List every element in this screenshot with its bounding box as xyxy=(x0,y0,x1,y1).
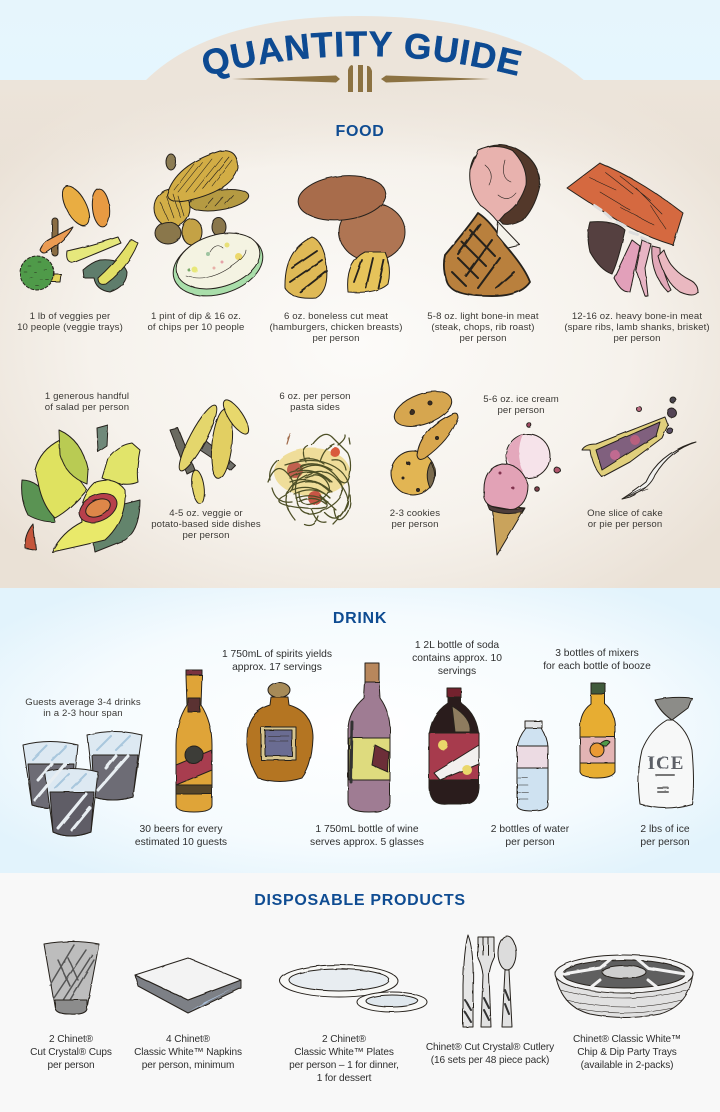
products background xyxy=(0,873,720,1112)
heading: drink: DRINK xyxy=(333,610,387,627)
caption: side dishes: potato-based side dishes xyxy=(151,519,261,530)
caption: ice cream: per person xyxy=(497,405,545,416)
icon: beer bottle xyxy=(176,670,212,812)
caption: soda: 1 2L bottle of soda xyxy=(415,640,499,651)
caption: ice: per person xyxy=(640,837,690,848)
caption: beer: 30 beers for every xyxy=(140,824,223,835)
caption: napkins: 4 Chinet® xyxy=(166,1034,211,1045)
item: beer xyxy=(135,670,227,848)
top fade xyxy=(0,80,720,170)
icon: pie slice and fork xyxy=(582,397,696,499)
item: mixers xyxy=(543,648,651,778)
panel: food xyxy=(0,16,720,588)
caption: trays: Chinet® Classic White™ xyxy=(573,1034,681,1045)
item: spirits xyxy=(222,649,332,782)
item: chips and dip xyxy=(147,151,270,333)
caption: side dishes: 4-5 oz. veggie or xyxy=(169,508,243,519)
item: glasses xyxy=(23,697,142,836)
caption: cups: Cut Crystal® Cups xyxy=(30,1047,112,1058)
caption: ice: 2 lbs of ice xyxy=(640,824,690,835)
caption: plates: Classic White™ Plates xyxy=(294,1047,394,1058)
item: ice cream xyxy=(483,394,560,555)
caption: trays: Chip & Dip Party Trays xyxy=(577,1047,677,1058)
icon: wine bottle xyxy=(348,663,390,812)
caption: soda: servings xyxy=(438,666,476,677)
item: boneless meat xyxy=(269,172,405,344)
icon: knife, fork, spoon xyxy=(463,935,516,1027)
caption: cutlery: Chinet® Cut Crystal® Cutlery xyxy=(426,1042,555,1053)
item: cake or pie xyxy=(582,397,696,530)
item: water xyxy=(491,721,570,848)
caption: cookies: per person xyxy=(391,519,439,530)
item: plates xyxy=(280,965,427,1084)
item: cups xyxy=(30,942,112,1071)
header arch xyxy=(145,16,585,81)
caption: plates: per person – 1 for dinner, xyxy=(289,1060,399,1071)
title: QUANTITY GUIDE xyxy=(203,31,522,79)
caption: boneless meat: per person xyxy=(312,333,360,344)
icon: plates xyxy=(280,965,427,1012)
caption: trays: (available in 2-packs) xyxy=(581,1060,673,1071)
caption: heavy ribs: (spare ribs, lamb shanks, brisket) xyxy=(564,322,710,333)
caption: wine: serves approx. 5 glasses xyxy=(310,837,424,848)
item: salad xyxy=(22,391,140,552)
icon: mixer bottle xyxy=(580,683,615,778)
caption: ice cream: 5-6 oz. ice cream xyxy=(483,394,559,405)
caption: bone-in meat: 5-8 oz. light bone-in meat xyxy=(427,311,539,322)
panel: disposable products xyxy=(0,873,720,1112)
caption: chips and dip: 1 pint of dip & 16 oz. xyxy=(151,311,241,322)
item: bone-in meat xyxy=(427,144,540,344)
caption: boneless meat: (hamburgers, chicken breasts) xyxy=(269,322,403,333)
caption: cups: per person xyxy=(47,1060,95,1071)
icon: napkins xyxy=(135,958,241,1013)
caption: plates: 1 for dessert xyxy=(317,1073,372,1084)
drink background xyxy=(0,588,720,873)
caption: chips and dip: of chips per 10 people xyxy=(147,322,245,333)
caption: cake or pie: or pie per person xyxy=(588,519,662,530)
caption: cookies: 2-3 cookies xyxy=(390,508,440,519)
item: veggies xyxy=(17,182,138,333)
caption: spirits: 1 750mL of spirits yields xyxy=(222,649,332,660)
icon: water bottle xyxy=(517,721,548,811)
caption: glasses: in a 2-3 hour span xyxy=(43,708,123,719)
icon: boneless meat xyxy=(285,172,405,298)
caption: bone-in meat: per person xyxy=(459,333,507,344)
caption: pasta: pasta sides xyxy=(290,402,340,413)
caption: veggies: 1 lb of veggies per xyxy=(30,311,111,322)
icon: chip and dip tray xyxy=(555,955,693,1018)
caption: veggies: 10 people (veggie trays) xyxy=(17,322,123,333)
caption: pasta: 6 oz. per person xyxy=(279,391,351,402)
icon: chips and dip xyxy=(154,151,270,306)
caption: napkins: Classic White™ Napkins xyxy=(134,1047,242,1058)
caption: soda: contains approx. 10 xyxy=(412,653,502,664)
food background xyxy=(0,80,720,588)
caption: cups: 2 Chinet® xyxy=(49,1034,94,1045)
item: cutlery xyxy=(426,935,555,1066)
caption: wine: 1 750mL bottle of wine xyxy=(315,824,419,835)
caption: beer: estimated 10 guests xyxy=(135,837,227,848)
item: cookies xyxy=(390,385,458,530)
icon: potato wedges xyxy=(170,397,253,505)
caption: salad: 1 generous handful xyxy=(45,391,129,402)
item: napkins xyxy=(134,958,242,1071)
icon: soda bottle xyxy=(429,688,479,804)
caption: boneless meat: 6 oz. boneless cut meat xyxy=(284,311,388,322)
caption: cutlery: (16 sets per 48 piece pack) xyxy=(431,1055,549,1066)
panel: drink xyxy=(0,588,720,873)
icon: spaghetti xyxy=(268,434,350,525)
icon: salad xyxy=(22,425,140,552)
panel: header background xyxy=(0,0,720,81)
caption: heavy ribs: per person xyxy=(613,333,661,344)
icon: veggie tray xyxy=(20,182,138,292)
item: soda xyxy=(412,640,502,804)
caption: napkins: per person, minimum xyxy=(142,1060,234,1071)
icon: ham and steak xyxy=(444,144,540,296)
caption: mixers: for each bottle of booze xyxy=(543,661,651,672)
caption: water: 2 bottles of water xyxy=(491,824,570,835)
icon: cookies xyxy=(390,385,458,495)
icon: cup xyxy=(44,942,99,1014)
heading: disposable products: DISPOSABLE PRODUCTS xyxy=(254,892,466,909)
item: wine xyxy=(310,663,424,848)
icon: spare ribs xyxy=(567,163,698,296)
caption: bone-in meat: (steak, chops, rib roast) xyxy=(431,322,535,333)
item: side dishes xyxy=(151,397,261,541)
icon: three glasses xyxy=(23,732,142,836)
icon: spirits bottle xyxy=(247,682,313,782)
ornament: divider with cutlery xyxy=(232,65,490,92)
item: ice xyxy=(638,697,694,848)
icon: ice bag xyxy=(638,697,694,808)
caption: heavy ribs: 12-16 oz. heavy bone-in meat xyxy=(572,311,702,322)
item: pasta xyxy=(268,391,351,525)
caption: side dishes: per person xyxy=(182,530,230,541)
caption: plates: 2 Chinet® xyxy=(322,1034,367,1045)
icon: ice cream cone xyxy=(484,423,560,555)
icon: ice bag: ICE xyxy=(648,753,684,774)
item: heavy ribs xyxy=(564,163,710,344)
caption: cake or pie: One slice of cake xyxy=(587,508,663,519)
item: trays xyxy=(555,955,693,1071)
caption: mixers: 3 bottles of mixers xyxy=(555,648,639,659)
caption: spirits: approx. 17 servings xyxy=(232,662,322,673)
caption: glasses: Guests average 3-4 drinks xyxy=(25,697,141,708)
caption: salad: of salad per person xyxy=(45,402,129,413)
heading: food: FOOD xyxy=(335,123,385,140)
caption: water: per person xyxy=(505,837,555,848)
